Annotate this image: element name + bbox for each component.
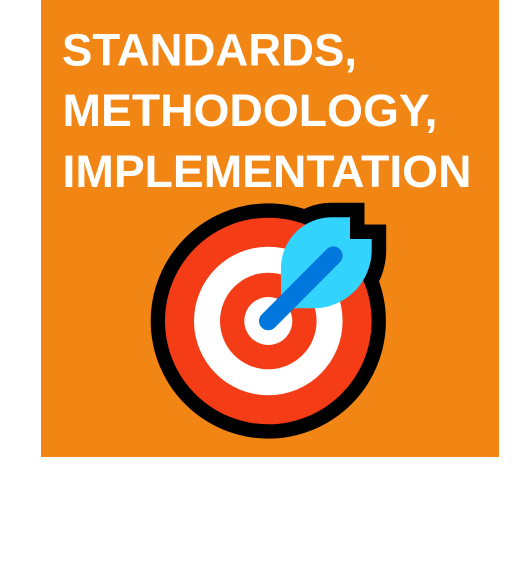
icon outline: fletching xyxy=(281,217,372,308)
target inner ring xyxy=(220,273,317,369)
icon outline: target xyxy=(151,203,386,439)
title line 3: IMPLEMENTATION xyxy=(62,146,472,197)
target bullseye xyxy=(244,297,292,345)
target outer ring xyxy=(165,218,372,424)
title line 2: METHODOLOGY, xyxy=(62,85,438,136)
arrow shaft xyxy=(268,256,333,321)
title xyxy=(62,24,472,197)
title line 1: STANDARDS, xyxy=(62,24,357,76)
arrow fletching xyxy=(281,217,372,308)
target white ring xyxy=(194,247,343,395)
icon: target with arrow xyxy=(151,203,386,439)
panel: orange background xyxy=(41,0,499,457)
